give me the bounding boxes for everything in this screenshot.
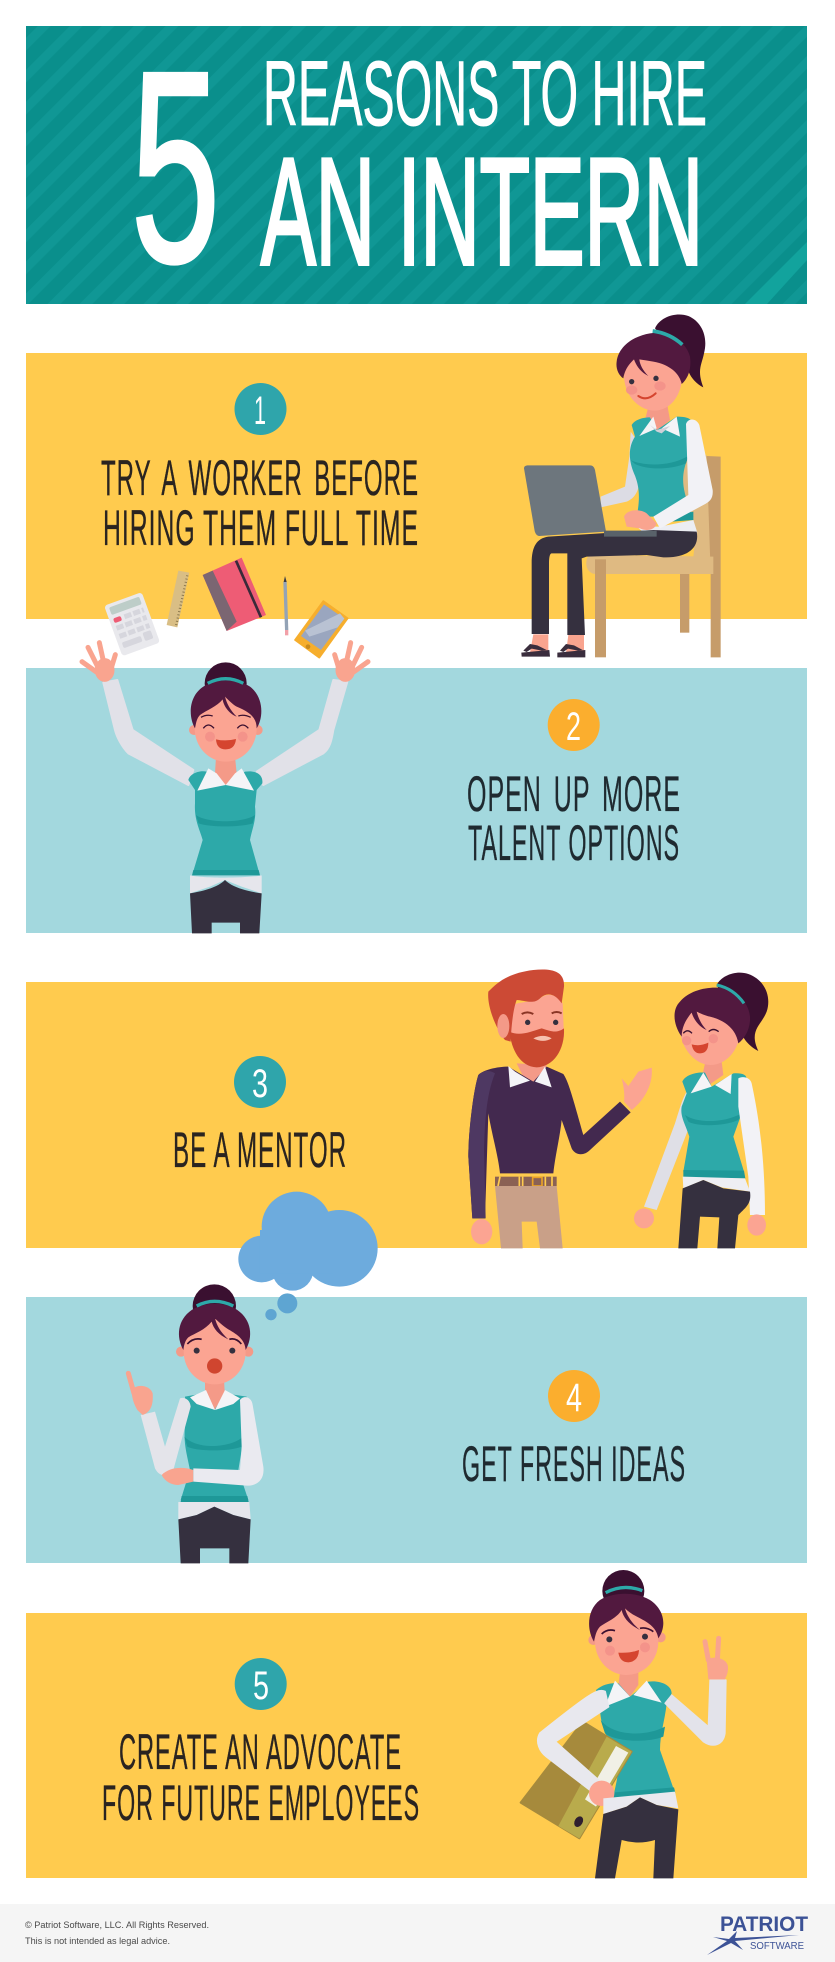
reason 3 number badge: 3 [252, 1062, 268, 1106]
illustration: bearded mentor [468, 969, 652, 1248]
reason 5 text: CREATE AN ADVOCATE [119, 1724, 402, 1780]
reason 5 number badge [235, 1658, 287, 1710]
illustration: intern with an idea [128, 1284, 264, 1563]
icon: thought bubble [238, 1192, 378, 1320]
icon: notebook [203, 558, 266, 631]
reason 4 number badge: 4 [566, 1376, 582, 1420]
reason 2 number badge: 2 [566, 705, 581, 749]
panel 4 background [26, 1297, 807, 1563]
reason 1 number badge [234, 383, 286, 435]
Patriot Software logo [707, 1913, 808, 1955]
reason 4 number badge [548, 1370, 600, 1422]
icon: binder [521, 1722, 632, 1838]
title banner: 5 [131, 15, 220, 319]
reason 2 text [467, 766, 681, 871]
icon: ruler [167, 571, 189, 627]
infographic canvas: BE A MENTOR [173, 1122, 347, 1178]
reason 5 number badge: 5 [253, 1664, 269, 1708]
copyright text: This is not intended as legal advice. [25, 1936, 170, 1947]
icon: pencil [284, 576, 287, 635]
icon: right hand [335, 643, 368, 679]
copyright text: © Patriot Software, LLC. All Rights Reserved. [25, 1920, 209, 1931]
reason 2 number badge [548, 699, 600, 751]
panel 5 background [26, 1613, 807, 1878]
footer bar [0, 1904, 835, 1962]
title banner [26, 15, 807, 319]
reason 3 number badge [234, 1056, 286, 1108]
illustration: falling office items [104, 558, 348, 658]
Patriot Software logo: SOFTWARE [750, 1941, 804, 1952]
illustration: laughing intern [634, 973, 768, 1248]
icon: smartphone [295, 601, 348, 658]
illustration: cheering intern with raised arms [82, 643, 368, 933]
reason 5 text [102, 1724, 420, 1831]
illustration: intern with laptop on chair [521, 314, 721, 657]
icon: left hand [82, 643, 115, 679]
reason 1 text [101, 450, 419, 556]
Patriot Software logo: PATRIOT [720, 1913, 808, 1936]
reason 1 number badge: 1 [254, 389, 266, 433]
infographic canvas: FOR FUTURE EMPLOYEES [102, 1775, 420, 1831]
panel 2 background [26, 668, 807, 933]
icon: calculator [104, 592, 160, 656]
panel 1 background [26, 353, 807, 619]
copyright text [25, 1920, 209, 1947]
illustration: intern with binder giving peace sign [521, 1570, 728, 1878]
panel 3 background [26, 982, 807, 1248]
infographic canvas: HIRING THEM FULL TIME [103, 500, 419, 556]
infographic canvas: TRY A WORKER BEFORE [101, 450, 419, 506]
